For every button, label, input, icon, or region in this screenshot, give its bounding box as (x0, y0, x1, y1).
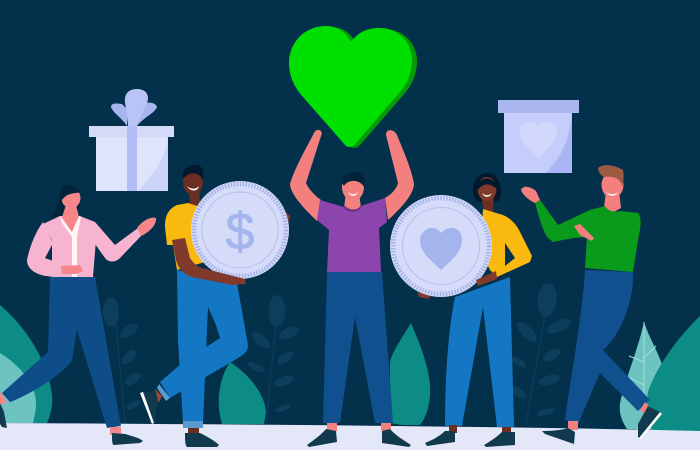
blouse (43, 216, 96, 277)
shoe back (638, 406, 662, 438)
coin heart (420, 228, 462, 270)
hand front (574, 224, 594, 241)
person: woman in pink (0, 185, 156, 445)
person: man in green (521, 165, 662, 444)
trousers (565, 270, 650, 424)
shoe front (542, 428, 575, 444)
trousers (2, 277, 121, 428)
shoe right (112, 433, 143, 445)
arm right (95, 222, 141, 262)
plant: dark right (508, 282, 573, 423)
hand under coin (417, 292, 432, 299)
yellow shirt (165, 203, 210, 270)
leaf: left light teal (0, 353, 36, 423)
arms (290, 130, 322, 221)
collar and placket (60, 216, 81, 277)
trousers (323, 272, 393, 423)
coin (191, 181, 289, 279)
hand left (521, 187, 540, 203)
gift box (89, 89, 174, 191)
person: man with dollar coin (140, 165, 290, 447)
hand right (137, 218, 156, 236)
leaf: right light (620, 322, 663, 430)
hand front (61, 265, 83, 274)
person: woman with heart coin (390, 173, 532, 447)
neck and head (604, 190, 621, 213)
leaf: centre (390, 323, 430, 425)
neck and head (188, 186, 200, 205)
raised shoe (143, 391, 158, 423)
neck and head (62, 205, 79, 233)
leaf: right dark (647, 316, 700, 433)
leaf: left dark teal (0, 305, 52, 423)
collar (344, 205, 361, 212)
cuff (157, 384, 170, 401)
hand behind coin (284, 210, 290, 222)
person: man in purple raising heart (290, 130, 414, 447)
trousers (445, 277, 514, 427)
plant: dark left (103, 297, 143, 423)
ankles (188, 428, 199, 435)
leaf: centre left (219, 362, 266, 424)
hair (598, 165, 624, 186)
plant: dark centre (246, 295, 301, 423)
trousers back leg (160, 290, 248, 398)
ankles (327, 423, 337, 431)
heart on box (520, 122, 557, 158)
neck and head (344, 192, 361, 212)
shoes (307, 429, 337, 447)
ankles (568, 421, 578, 430)
trousers front (177, 270, 248, 424)
hair and head (473, 173, 501, 202)
ground (0, 423, 700, 450)
purple shirt (317, 198, 387, 272)
dollar sign: $ (226, 203, 255, 261)
arm left (27, 222, 64, 278)
arm (172, 238, 246, 285)
back hair (50, 185, 81, 218)
box with heart (498, 100, 579, 173)
hand on coin (476, 271, 497, 286)
ankles (449, 425, 457, 433)
sweater (535, 200, 641, 272)
sweater (480, 209, 532, 277)
shoe left (0, 403, 7, 428)
big green heart (289, 26, 417, 148)
bow (111, 89, 157, 126)
shoes (425, 431, 455, 446)
ankle (110, 427, 121, 435)
shoe front (185, 433, 219, 447)
coin (390, 195, 492, 297)
